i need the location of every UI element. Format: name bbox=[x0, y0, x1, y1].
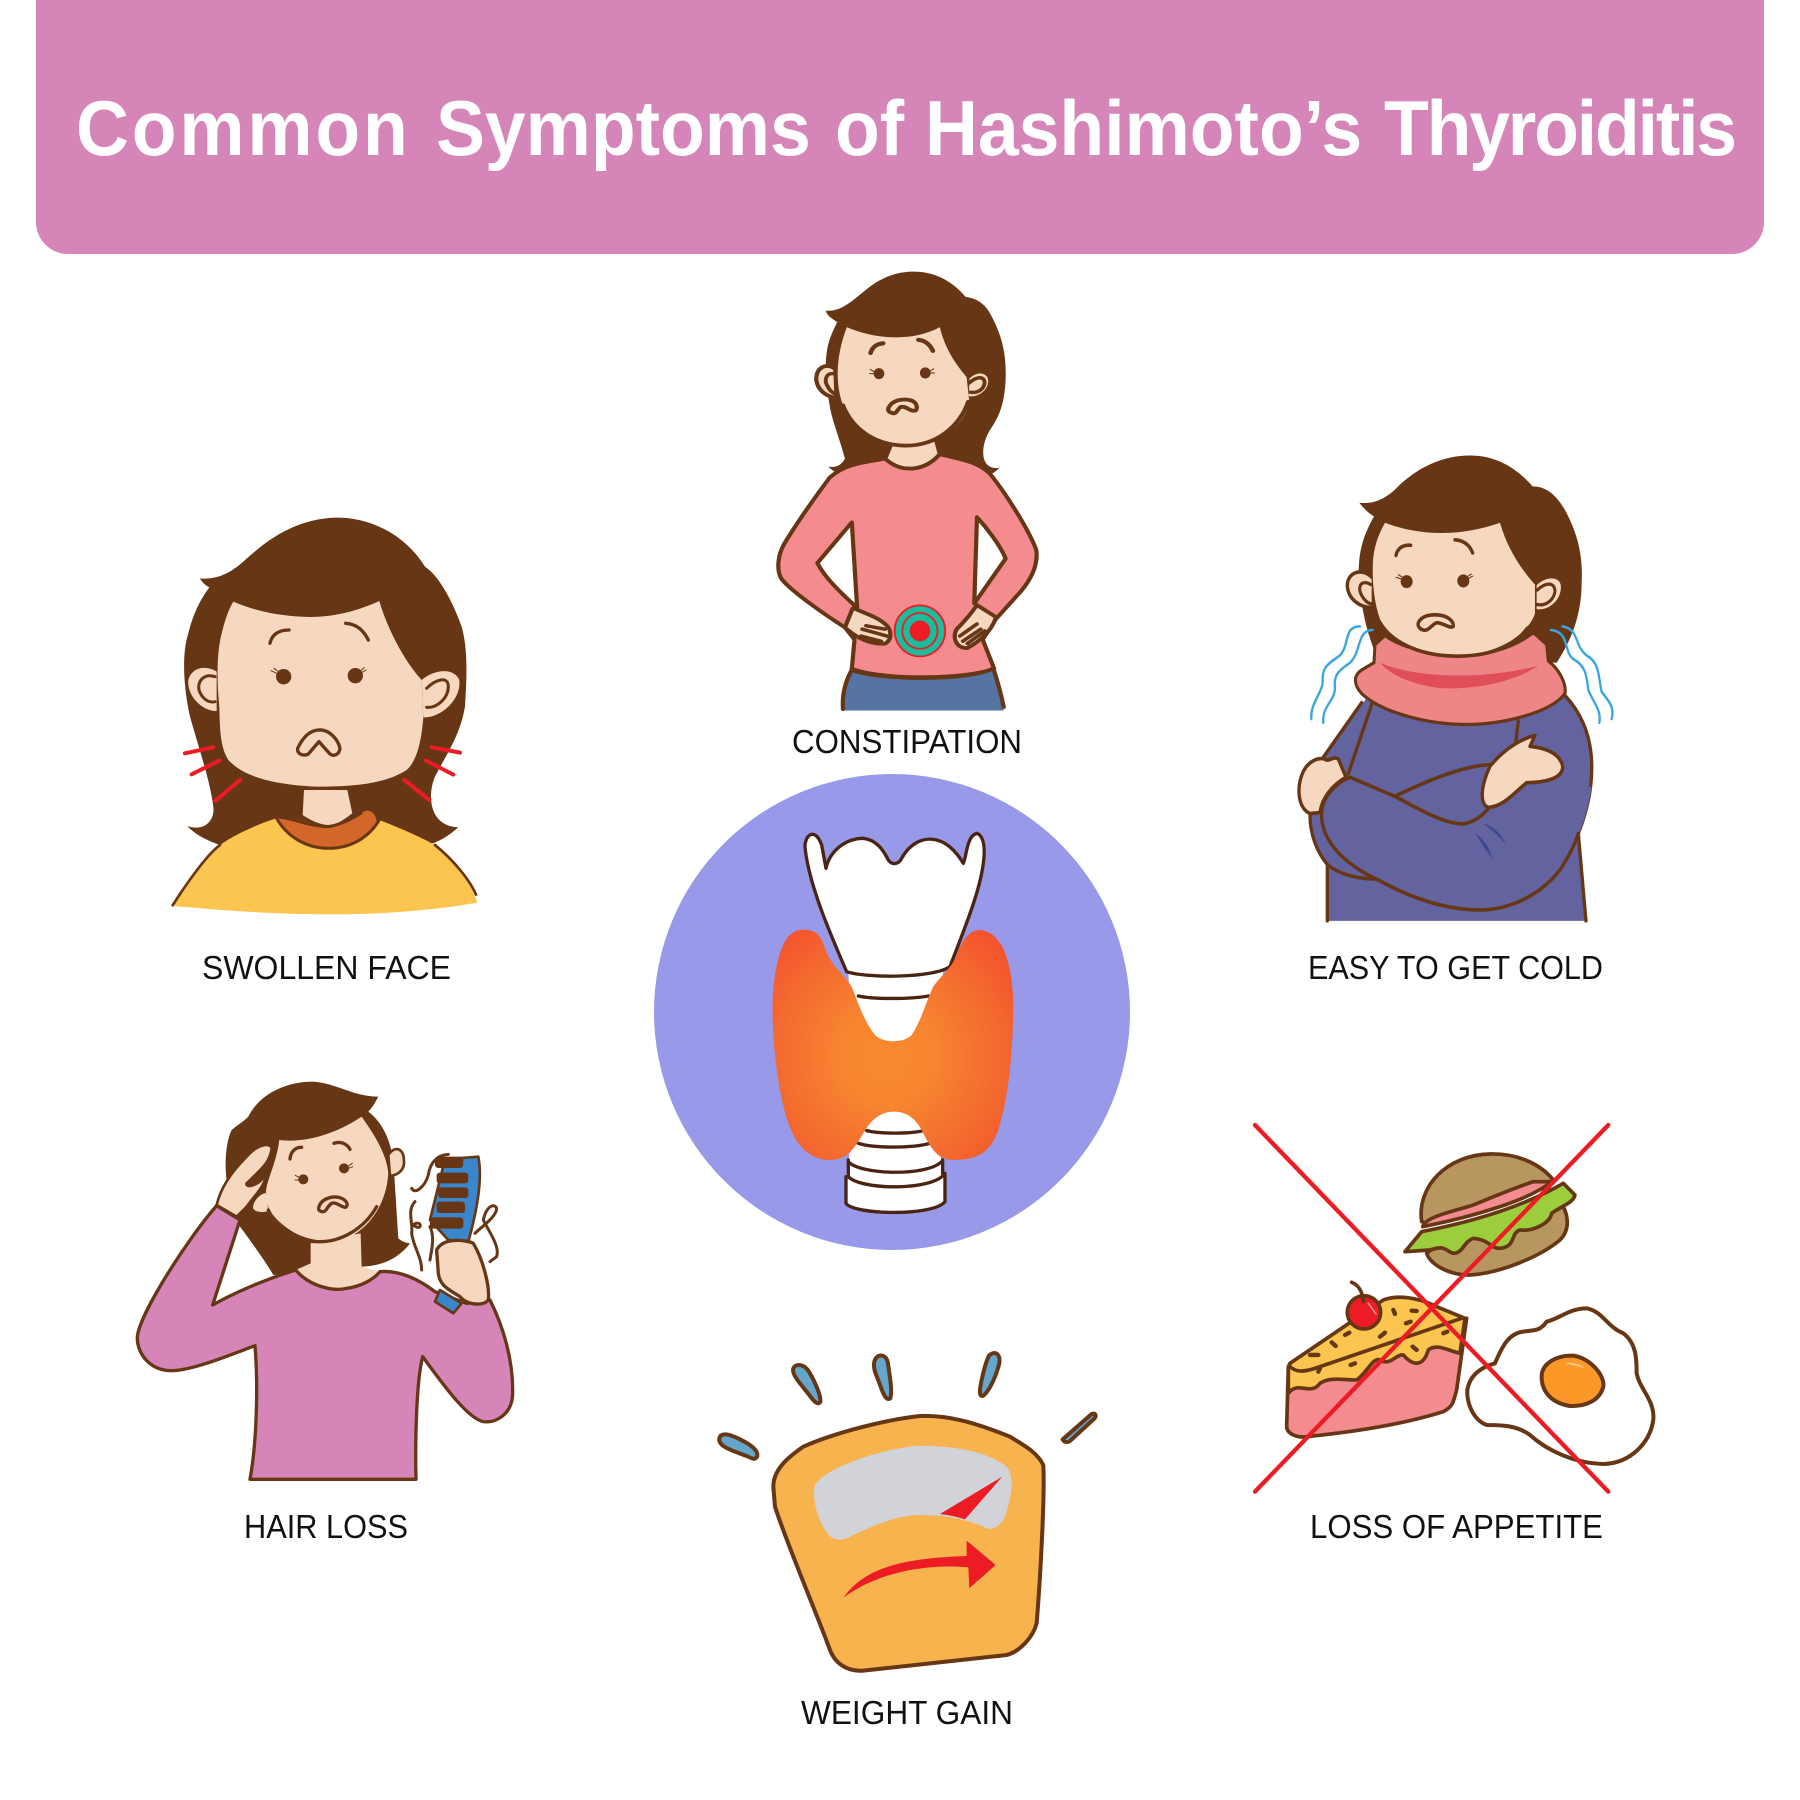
title banner bbox=[36, 0, 1764, 254]
neck bbox=[303, 790, 352, 825]
neck bbox=[296, 1233, 380, 1289]
sweater bbox=[1310, 694, 1592, 921]
red cross bbox=[1255, 1125, 1608, 1492]
panel: thyroid circle bbox=[654, 774, 1130, 1250]
label: LOSS OF APPETITE bbox=[1310, 1508, 1603, 1545]
pain target bbox=[895, 605, 945, 656]
sprinkles bbox=[1310, 1310, 1447, 1372]
panel: swollen face bbox=[173, 518, 477, 986]
lashes bbox=[271, 668, 366, 673]
eyes bbox=[276, 668, 363, 684]
display window bbox=[814, 1446, 1012, 1540]
panel: weight gain bbox=[719, 1353, 1096, 1731]
hand holding comb bbox=[437, 1240, 489, 1304]
title: Hashimoto’s bbox=[925, 85, 1383, 173]
left ear bbox=[252, 1192, 270, 1213]
sweater bbox=[137, 1206, 513, 1479]
label: WEIGHT GAIN bbox=[801, 1694, 1013, 1731]
right hand bbox=[1482, 735, 1563, 807]
impact rays bbox=[719, 1353, 1096, 1459]
trachea bbox=[846, 968, 945, 1212]
cake slice bbox=[1287, 1282, 1467, 1437]
label: CONSTIPATION bbox=[792, 723, 1022, 760]
sleeve creases bbox=[1475, 824, 1507, 858]
shirt bbox=[173, 818, 477, 914]
hair bbox=[1359, 455, 1582, 663]
label: HAIR LOSS bbox=[244, 1508, 408, 1545]
left ear bbox=[1347, 572, 1373, 607]
shiver lines bbox=[1311, 626, 1613, 723]
panel: loss of appetite bbox=[1255, 1125, 1653, 1545]
panel: constipation bbox=[778, 272, 1037, 760]
front arm bbox=[1322, 777, 1592, 910]
eyebrows bbox=[871, 340, 933, 353]
eyes bbox=[298, 1163, 349, 1184]
raised hand bbox=[217, 1145, 272, 1217]
title: Common bbox=[76, 85, 434, 173]
eyes bbox=[1401, 574, 1469, 588]
title: Symptoms bbox=[436, 85, 831, 173]
burger bbox=[1405, 1154, 1575, 1275]
label: SWOLLEN FACE bbox=[202, 949, 451, 986]
comb bbox=[430, 1157, 480, 1313]
shirt bbox=[778, 454, 1037, 677]
mouth bbox=[298, 730, 340, 755]
face bbox=[218, 601, 423, 787]
right ear bbox=[967, 372, 990, 398]
mouth bbox=[888, 400, 917, 413]
face bbox=[838, 327, 969, 446]
title: of bbox=[835, 85, 925, 173]
left ear bbox=[816, 366, 837, 398]
left ear inner bbox=[826, 374, 837, 394]
face bbox=[266, 1117, 388, 1241]
fallen hairs bbox=[411, 1154, 497, 1270]
larynx bbox=[805, 833, 984, 976]
right ear bbox=[1535, 577, 1563, 611]
right ear inner bbox=[969, 378, 985, 392]
left hand bbox=[1299, 758, 1346, 814]
cherry bbox=[1347, 1296, 1381, 1329]
right ear bbox=[422, 671, 459, 717]
right ear bbox=[388, 1149, 404, 1176]
scarf fold bbox=[1380, 663, 1538, 688]
fried egg bbox=[1467, 1308, 1653, 1464]
eyebrows bbox=[290, 1142, 350, 1159]
needle bbox=[940, 1477, 1002, 1519]
eyebrows bbox=[1396, 540, 1473, 555]
scarf bbox=[1355, 633, 1565, 725]
arrow bbox=[843, 1541, 996, 1598]
left ear bbox=[188, 668, 217, 711]
panel: easy to get cold bbox=[1299, 455, 1613, 986]
collar bbox=[277, 811, 377, 848]
lashes bbox=[870, 369, 934, 374]
swelling marks bbox=[185, 747, 460, 801]
eyes bbox=[874, 367, 931, 379]
mouth bbox=[1418, 615, 1453, 630]
right hand bbox=[955, 605, 996, 648]
pants bbox=[843, 669, 1004, 710]
face bbox=[1373, 523, 1535, 655]
circle background bbox=[654, 774, 1130, 1250]
mouth bbox=[319, 1197, 347, 1212]
scale body bbox=[773, 1416, 1044, 1671]
title: Thyroiditis bbox=[1384, 85, 1735, 173]
hair bbox=[184, 518, 466, 845]
label: EASY TO GET COLD bbox=[1308, 949, 1603, 986]
neck bbox=[885, 440, 940, 469]
eyebrows bbox=[270, 623, 368, 643]
thyroid gland bbox=[773, 930, 1013, 1160]
hair bbox=[226, 1082, 410, 1275]
hair bbox=[826, 272, 1006, 475]
left hand bbox=[845, 609, 890, 644]
panel: hair loss bbox=[137, 1082, 513, 1545]
